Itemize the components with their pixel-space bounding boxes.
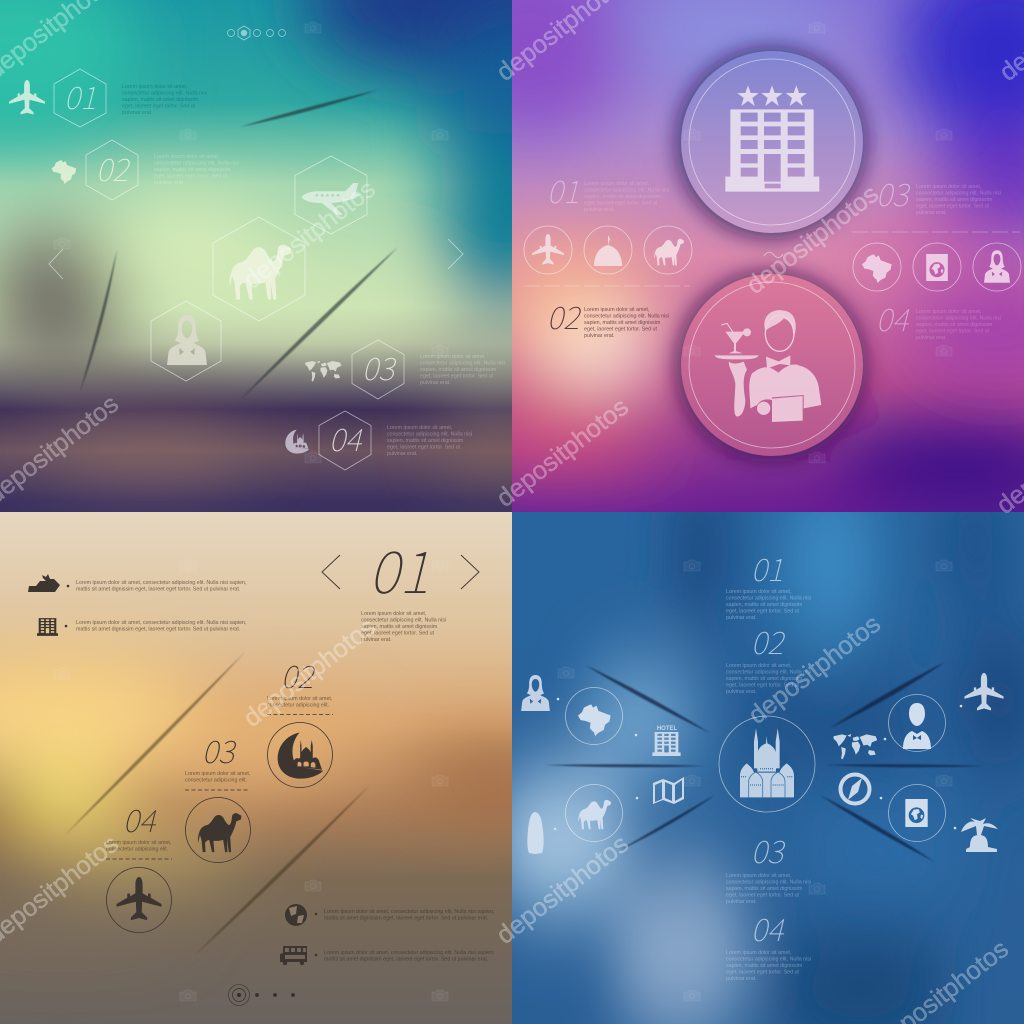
list row: double-decker bus [280,946,494,965]
item 01: plane, hexagon and text [9,69,207,127]
list row: yacht: Lorem ipsum dolor sit amet, consectetur adipiscing elit. Nulla nisi sapien, [76,580,246,586]
pagination [228,984,295,1006]
watermarks: depositphotos [238,175,381,295]
item 01: number and text: Lorem ipsum dolor sit amet, [584,181,649,187]
item 02: number and text, highlighted [550,306,669,338]
item 02: number and text, highlighted: sapien, mattis sit amet dignissim [584,320,661,326]
item 02: Brazil, hexagon and text: 02 [96,145,131,190]
hexagon: camel [213,217,305,321]
list row: globe: mattis sit amet dignissim eget, laoreet eget tortor. Sed ut pulvinar erat. [324,916,488,922]
item 01: consectetur adipiscing elit. Nulla nisi [726,596,811,602]
heading 01 with arrows and text: consectetur adipiscing elit. Nulla nisi [361,618,446,624]
item 04: consectetur adipiscing elit. [106,846,168,852]
purple panel blurred background [512,0,1024,512]
blue panel blurred background [490,470,1024,1024]
right bottom: compass, passport circle, palm island [840,774,998,852]
item 02: number and text, highlighted: Lorem ipsum dolor sit amet, [584,307,649,313]
item 04: eget, laoreet eget tortor. Sed ut [726,970,800,976]
item 01: Lorem ipsum dolor sit amet, [726,589,791,595]
item 03: world map, hexagon and text: consectetur adipiscing elit. Nulla nisi [420,361,505,367]
list row: globe: Lorem ipsum dolor sit amet, consectetur adipiscing elit. Nulla nisi sapien, [324,909,494,915]
hexagon: jet [295,156,367,234]
item 03: world map, hexagon and text [305,340,505,399]
item 04 [726,905,811,982]
item 02 [267,652,333,788]
item 04 [106,796,172,932]
item 01: pulvinar erat. [726,615,757,621]
sand panel blurred background [0,512,512,1024]
item 04: crescent, hexagon and text: pulvinar erat. [387,451,418,457]
left icon row: plane, dome, camel [524,226,692,274]
item 03: number and text: Lorem ipsum dolor sit amet, [916,184,981,190]
paper slit shadows [65,652,370,955]
item 02: Brazil, hexagon and text: Lorem ipsum dolor sit amet, [154,154,219,160]
right icon row: Brazil, passport, woman [853,243,1021,291]
item 01: sapien, mattis sit amet dignissim [726,602,803,608]
item 02: Lorem ipsum dolor sit amet, [726,663,791,669]
item 04: crescent, hexagon and text: 04 [329,415,363,460]
item 04: number and text: eget, laoreet eget tortor. Sed ut [916,329,990,335]
item 02 [726,618,811,695]
item 04: crescent, hexagon and text [285,411,472,470]
item 02: Lorem ipsum dolor sit amet, [267,696,332,702]
item 03: Lorem ipsum dolor sit amet, [185,771,250,777]
item 03: Lorem ipsum dolor sit amet, [726,873,791,879]
item 02: number and text, highlighted: consectetur adipiscing elit. Nulla nisi [584,314,669,320]
heading 01 with arrows and text: Lorem ipsum dolor sit amet, [361,611,426,617]
item 01: plane, hexagon and text: consectetur adipiscing elit. Nulla nisi [122,91,207,97]
dashed divider right [852,232,1020,233]
pagination dots [228,26,286,40]
item 03: world map, hexagon and text: pulvinar erat. [420,380,451,386]
item 04: 04 [123,796,157,841]
left bottom: map, camel circle, robed figure [527,777,684,854]
heading 01 with arrows and text: eget, laoreet eget tortor. Sed ut [361,631,435,637]
item 02: Brazil, hexagon and text: pulvinar erat. [154,180,185,186]
item 02: 02 [281,652,316,697]
list row: double-decker bus: mattis sit amet dignissim eget, laoreet eget tortor. Sed ut pulvinar erat. [324,956,488,962]
item 03: number and text: 03 [876,170,911,215]
hexagon: woman [151,301,221,381]
item 02: eget, laoreet eget tortor. Sed ut [726,683,800,689]
item 03: eget, laoreet eget tortor. Sed ut [726,893,800,899]
item 02: 02 [751,618,786,663]
arrow: previous [49,249,63,279]
item 02: number and text, highlighted: eget, laoreet eget tortor. Sed ut [584,327,658,333]
item 01: number and text: eget, laoreet eget tortor. Sed ut [584,201,658,207]
item 02: Brazil, hexagon and text: consectetur adipiscing elit. Nulla nisi [154,161,239,167]
panel: sand diagonal infographic [0,512,512,1024]
item 03: number and text: eget, laoreet eget tortor. Sed ut [916,204,990,210]
arrow: next [448,239,463,269]
item 04: Lorem ipsum dolor sit amet, [106,840,171,846]
item 04: consectetur adipiscing elit. Nulla nisi [726,957,811,963]
panel: blue radial infographic [490,470,1024,1024]
item 01: number and text: sapien, mattis sit amet dignissim [584,194,661,200]
item 03 [185,727,250,862]
item 01: number and text: pulvinar erat. [584,207,615,213]
list row: hotel: mattis sit amet dignissim eget, laoreet eget tortor. Sed ut pulvinar erat. [76,626,240,632]
item 03: number and text: pulvinar erat. [916,210,947,216]
item 01: plane, hexagon and text: 01 [64,73,96,118]
item 02: consectetur adipiscing elit. Nulla nisi [726,670,811,676]
item 02: Brazil, hexagon and text: sapien, mattis sit amet dignissim [154,167,231,173]
item 03: world map, hexagon and text: sapien, mattis sit amet dignissim [420,367,497,373]
item 01: plane, hexagon and text: eget, laoreet eget tortor. Sed ut [122,104,196,110]
icon: hotel with sign [652,726,681,756]
dashed divider left [524,286,690,287]
item 03: world map, hexagon and text: 03 [362,344,397,389]
heading 01 with arrows and text [322,551,480,642]
item 04: crescent, hexagon and text: consectetur adipiscing elit. Nulla nisi [387,432,472,438]
teal panel blurred background [0,0,512,512]
item 01: plane, hexagon and text: sapien, mattis sit amet dignissim [122,97,199,103]
item 04: pulvinar erat. [726,976,757,982]
list row: hotel: Lorem ipsum dolor sit amet, consectetur adipiscing elit. Nulla nisi sapien, [76,620,246,626]
item 03: number and text: sapien, mattis sit amet dignissim [916,197,993,203]
item 02: consectetur adipiscing elit. [267,702,329,708]
heading 01 with arrows and text: 01 [369,526,429,610]
list row: hotel [37,618,246,636]
item 02: sapien, mattis sit amet dignissim [726,676,803,682]
panel: teal hexagon infographic [0,0,512,512]
item 04: crescent, hexagon and text: eget, laoreet eget tortor. Sed ut [387,445,461,451]
item 03: consectetur adipiscing elit. Nulla nisi [726,880,811,886]
center circle: mosque [719,716,815,812]
list row: double-decker bus: Lorem ipsum dolor sit amet, consectetur adipiscing elit. Nulla nisi sapien, [324,950,494,956]
item 01: number and text [550,180,669,212]
item 04: sapien, mattis sit amet dignissim [726,963,803,969]
item 04: number and text [880,308,1001,340]
list row: yacht: mattis sit amet dignissim eget, laoreet eget tortor. Sed ut pulvinar erat. [76,586,240,592]
item 01 [726,545,811,621]
item 02: number and text, highlighted: 02 [547,293,582,338]
paper slit shadows [80,90,398,400]
paper slit shadows [545,662,985,862]
item 03: number and text [880,184,1001,215]
icon: waiter with tray [715,310,821,422]
tilde mark [764,252,783,258]
item 03: 03 [751,827,786,872]
list row: globe [285,904,494,926]
item 04: number and text: sapien, mattis sit amet dignissim [916,322,993,328]
item 03: world map, hexagon and text: Lorem ipsum dolor sit amet, [420,354,485,360]
item 02: Brazil, hexagon and text [52,140,239,200]
left top: woman and Brazil circle [521,675,637,744]
item 03: pulvinar erat. [726,899,757,905]
item 03: number and text: consectetur adipiscing elit. Nulla nisi [916,191,1001,197]
item 03: 03 [202,727,237,772]
circle: waiter [675,270,867,462]
icon: mosque [740,728,794,797]
item 03: sapien, mattis sit amet dignissim [726,886,803,892]
watermarks: depositphotos [238,613,381,733]
item 03: consectetur adipiscing elit. [185,778,247,784]
icon: hotel with sign: HOTEL [657,726,677,732]
item 01: number and text: consectetur adipiscing elit. Nulla nisi [584,188,669,194]
item 04: number and text: Lorem ipsum dolor sit amet, [916,309,981,315]
item 04: crescent, hexagon and text: sapien, mattis sit amet dignissim [387,438,464,444]
item 03 [726,827,811,905]
icon: hotel with three stars [725,85,819,192]
item 02: number and text, highlighted: pulvinar erat. [584,333,615,339]
right top: plane, waiter circle, world map [834,673,1004,759]
item 04: Lorem ipsum dolor sit amet, [726,950,791,956]
item 02: Brazil, hexagon and text: eget, laoreet eget tortor. Sed ut [154,174,228,180]
heading 01 with arrows and text: pulvinar erat. [361,637,392,643]
item 04: number and text: pulvinar erat. [916,335,947,341]
watermarks: depositphotos [491,393,634,513]
item 01: 01 [751,545,783,590]
item 04: crescent, hexagon and text: Lorem ipsum dolor sit amet, [387,425,452,431]
circle: hotel [675,47,867,239]
item 01: plane, hexagon and text: Lorem ipsum dolor sit amet, [122,84,187,90]
item 01: plane, hexagon and text: pulvinar erat. [122,110,153,116]
heading 01 with arrows and text: sapien, mattis sit amet dignissim [361,624,438,630]
item 02: pulvinar erat. [726,689,757,695]
panel: purple circles infographic [512,0,1024,512]
watermarks: depositphotos [741,180,884,300]
item 04: number and text: consectetur adipiscing elit. Nulla nisi [916,316,1001,322]
watermarks: depositphotos [491,830,634,950]
item 01: number and text: 01 [547,167,579,212]
item 04: 04 [751,905,785,950]
item 01: eget, laoreet eget tortor. Sed ut [726,609,800,615]
item 04: number and text: 04 [876,295,910,340]
item 03: world map, hexagon and text: eget, laoreet eget tortor. Sed ut [420,374,494,380]
watermarks: depositphotos [743,610,886,730]
list row: yacht [28,574,246,592]
